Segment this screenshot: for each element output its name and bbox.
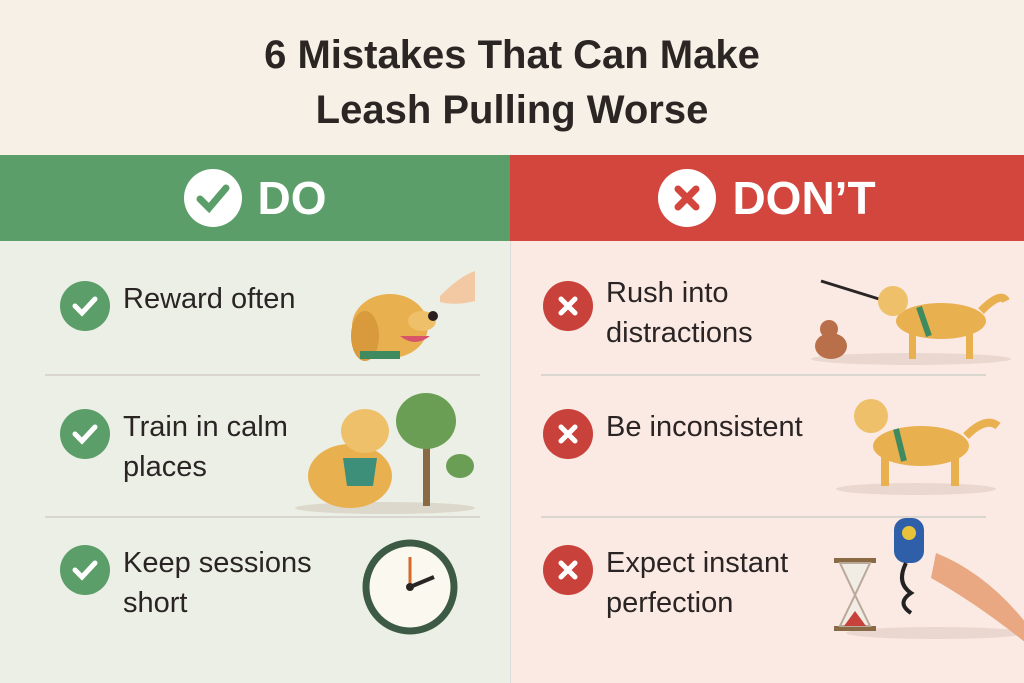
panel: dont [510, 241, 1024, 683]
illustration: dog and cat [811, 280, 1011, 365]
illustration: clock [362, 540, 458, 634]
illustration: dog getting treat [351, 271, 475, 361]
dont item 2 [543, 409, 803, 459]
dont item 3: perfection [606, 587, 733, 619]
title [264, 33, 760, 132]
title: 6 Mistakes That Can Make [264, 33, 760, 77]
header: do: DO [258, 172, 326, 224]
dont item 1: distractions [606, 317, 753, 349]
do item 2: Train in calm [123, 411, 288, 443]
illustration: dog and trees [295, 393, 475, 514]
dont item 3: Expect instant [606, 547, 788, 579]
illustration: hourglass and clicker hand [834, 518, 1024, 642]
dont item 1: Rush into [606, 277, 729, 309]
do item 3 [60, 545, 312, 619]
header: dont [510, 155, 1024, 241]
header: dont: DON’T [732, 172, 876, 224]
do item 1 [60, 281, 296, 331]
do item 3: Keep sessions [123, 547, 312, 579]
dont item 1 [543, 277, 753, 349]
dont item 2: Be inconsistent [606, 411, 803, 443]
do item 3: short [123, 587, 187, 619]
do item 1: Reward often [123, 283, 296, 315]
illustration: dog walking [836, 399, 1000, 495]
dont item 3 [543, 545, 788, 619]
do item 2 [60, 409, 288, 483]
do item 2: places [123, 451, 207, 483]
title: Leash Pulling Worse [316, 88, 708, 132]
header: do [0, 155, 510, 241]
panel: do [0, 241, 510, 683]
